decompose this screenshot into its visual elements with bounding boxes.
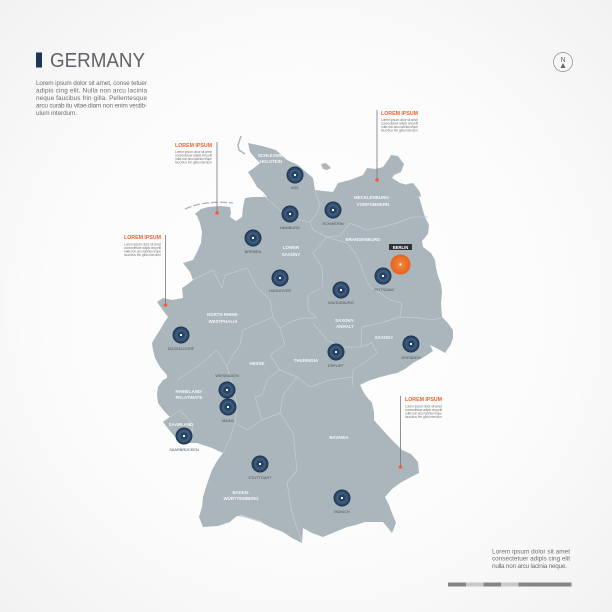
callout: south-east: faucibus frin gilla interdum [405, 415, 442, 419]
intro text block: arcu curab itu vitae diam non enim vestib- [36, 102, 147, 110]
callout: west: consectetuer adipis cing elit [124, 246, 161, 250]
callout: south-east: LOREM IPSUM [405, 397, 442, 403]
state labels: SAARLAND [169, 422, 193, 427]
callout: west [124, 235, 167, 307]
state labels: LOWER [283, 245, 300, 250]
state labels: BADEN- [232, 490, 250, 495]
intro text block: adipis cing elit. Nulla non arcu lacinia [36, 88, 147, 94]
state labels: WÜRTTEMBERG [223, 496, 259, 501]
title: GERMANY [50, 50, 145, 72]
pin: Magdeburg [328, 282, 354, 305]
callout: north-east: consectetuer adipis cing elit [381, 122, 418, 126]
pin: Hannover: HANNOVER [269, 288, 291, 293]
intro text block: neque faucibus frin gilla. Pellentesque [36, 95, 147, 102]
pin: Saarbrucken: SAARBRÜCKEN [169, 447, 199, 452]
pin: Erfurt: ERFURT [328, 363, 344, 368]
pin: Kiel [286, 166, 304, 190]
icon: compass: N [560, 57, 566, 64]
pin: Dresden: DRESDEN [401, 355, 421, 360]
state labels: NORTH RHINE- [207, 312, 240, 317]
callout: south-east: Lorem ipsum dolor sit amet [405, 404, 442, 408]
callout: west: LOREM IPSUM [124, 235, 161, 241]
state labels: SAXONY [375, 335, 393, 340]
state labels: RHINELAND- [175, 389, 203, 394]
state labels: BAVARIA [329, 435, 349, 440]
callout: north-west [175, 142, 219, 215]
callout: south-east: nulla non arcu lacinia neque [405, 412, 442, 416]
callout: west: nulla non arcu lacinia neque [124, 250, 161, 254]
callout: north-west: LOREM IPSUM [175, 143, 212, 149]
state labels: ANHALT [336, 324, 354, 329]
state labels: PALATINATE [176, 395, 202, 400]
state labels: MECKLENBURG- [354, 195, 391, 200]
intro text block: ulum interdum. [36, 110, 77, 117]
callout: north-east [375, 110, 418, 182]
intro text block [36, 80, 148, 117]
pin: Mainz [220, 398, 236, 423]
map: Fehmarn island [321, 163, 331, 170]
pin: Berlin capital: BERLIN [393, 245, 408, 250]
map: Sylt island [238, 136, 245, 154]
pin: Hamburg [280, 206, 300, 230]
map: Frisian islands [185, 202, 233, 209]
state labels: SAXONY- [335, 318, 355, 323]
pin: Dresden [401, 336, 421, 360]
callout: north-west: consectetuer adipis cing elit [175, 154, 212, 158]
pin: Munich: MUNICH [334, 509, 350, 514]
callout: south-east [399, 396, 442, 469]
pin: Stuttgart: STUTTGART [248, 475, 272, 480]
city pins [168, 166, 421, 514]
bottom text block: nulla non arcu lacinia neque. [492, 563, 567, 570]
callout: south-east: consectetuer adipis cing elit [405, 408, 442, 412]
callout: north-east: nulla non arcu lacinia neque [381, 125, 418, 129]
map: state borders [163, 190, 443, 543]
callout: west: Lorem ipsum dolor sit amet [124, 242, 161, 246]
bottom text block: Lorem ipsum dolor sit amet [492, 548, 570, 556]
pin: Wiesbaden: WIESBADEN [215, 373, 239, 378]
state labels: HOLSTEIN [260, 159, 282, 164]
pin: Munich [334, 490, 350, 514]
state labels: THURINGIA [294, 358, 319, 363]
pin: Bremen: BREMEN [245, 249, 262, 254]
pin: Berlin capital [389, 244, 412, 274]
pin: Potsdam: POTSDAM [374, 287, 394, 292]
state labels: WESTPHALIA [208, 319, 238, 324]
pin: Hannover [269, 270, 291, 293]
scale bar [448, 582, 572, 586]
pin: Mainz: MAINZ [222, 418, 235, 423]
icon: compass [554, 52, 572, 72]
callout: north-west: faucibus frin gilla interdum [175, 160, 212, 164]
intro text block: Lorem ipsum dolor sit amet, conse tetuer [36, 80, 148, 87]
pin: Stuttgart [248, 456, 272, 480]
state labels: BRANDENBURG [346, 237, 381, 242]
callout: north-east: LOREM IPSUM [381, 111, 418, 117]
pin: Erfurt [328, 344, 344, 368]
pin: Dusseldorf [168, 326, 195, 351]
pin: Hamburg: HAMBURG [280, 225, 300, 230]
map: Usedom island [407, 183, 421, 197]
state labels: VORPOMMERN [357, 202, 389, 207]
pin: Dusseldorf: DÜSSELDORF [168, 346, 195, 351]
callout: north-east: Lorem ipsum dolor sit amet [381, 118, 418, 122]
pin: Kiel: KIEL [291, 185, 300, 190]
callout: north-east: faucibus frin gilla interdum [381, 128, 418, 132]
state labels [169, 153, 393, 501]
map: land outline [152, 143, 453, 543]
pin: Saarbrucken [169, 428, 199, 452]
pin: Wiesbaden [215, 373, 239, 398]
state labels: SCHLESWIG- [258, 153, 287, 158]
bottom text block [492, 548, 570, 570]
pin: Bremen [244, 230, 262, 254]
pin: Schwerin: SCHWERIN [322, 221, 344, 226]
state labels: SAXONY [282, 252, 300, 257]
callout: north-west: nulla non arcu lacinia neque [175, 157, 212, 161]
callout: west: faucibus frin gilla interdum [124, 253, 161, 257]
map of Germany [152, 136, 453, 543]
pin: Magdeburg: MAGDEBURG [328, 300, 354, 305]
bottom text block: consectetuer adipis cing elit [492, 556, 570, 562]
state labels: HESSE [250, 361, 265, 366]
pin: Potsdam [374, 268, 394, 292]
pin: Schwerin [322, 202, 344, 226]
callout: north-west: Lorem ipsum dolor sit amet [175, 150, 212, 154]
